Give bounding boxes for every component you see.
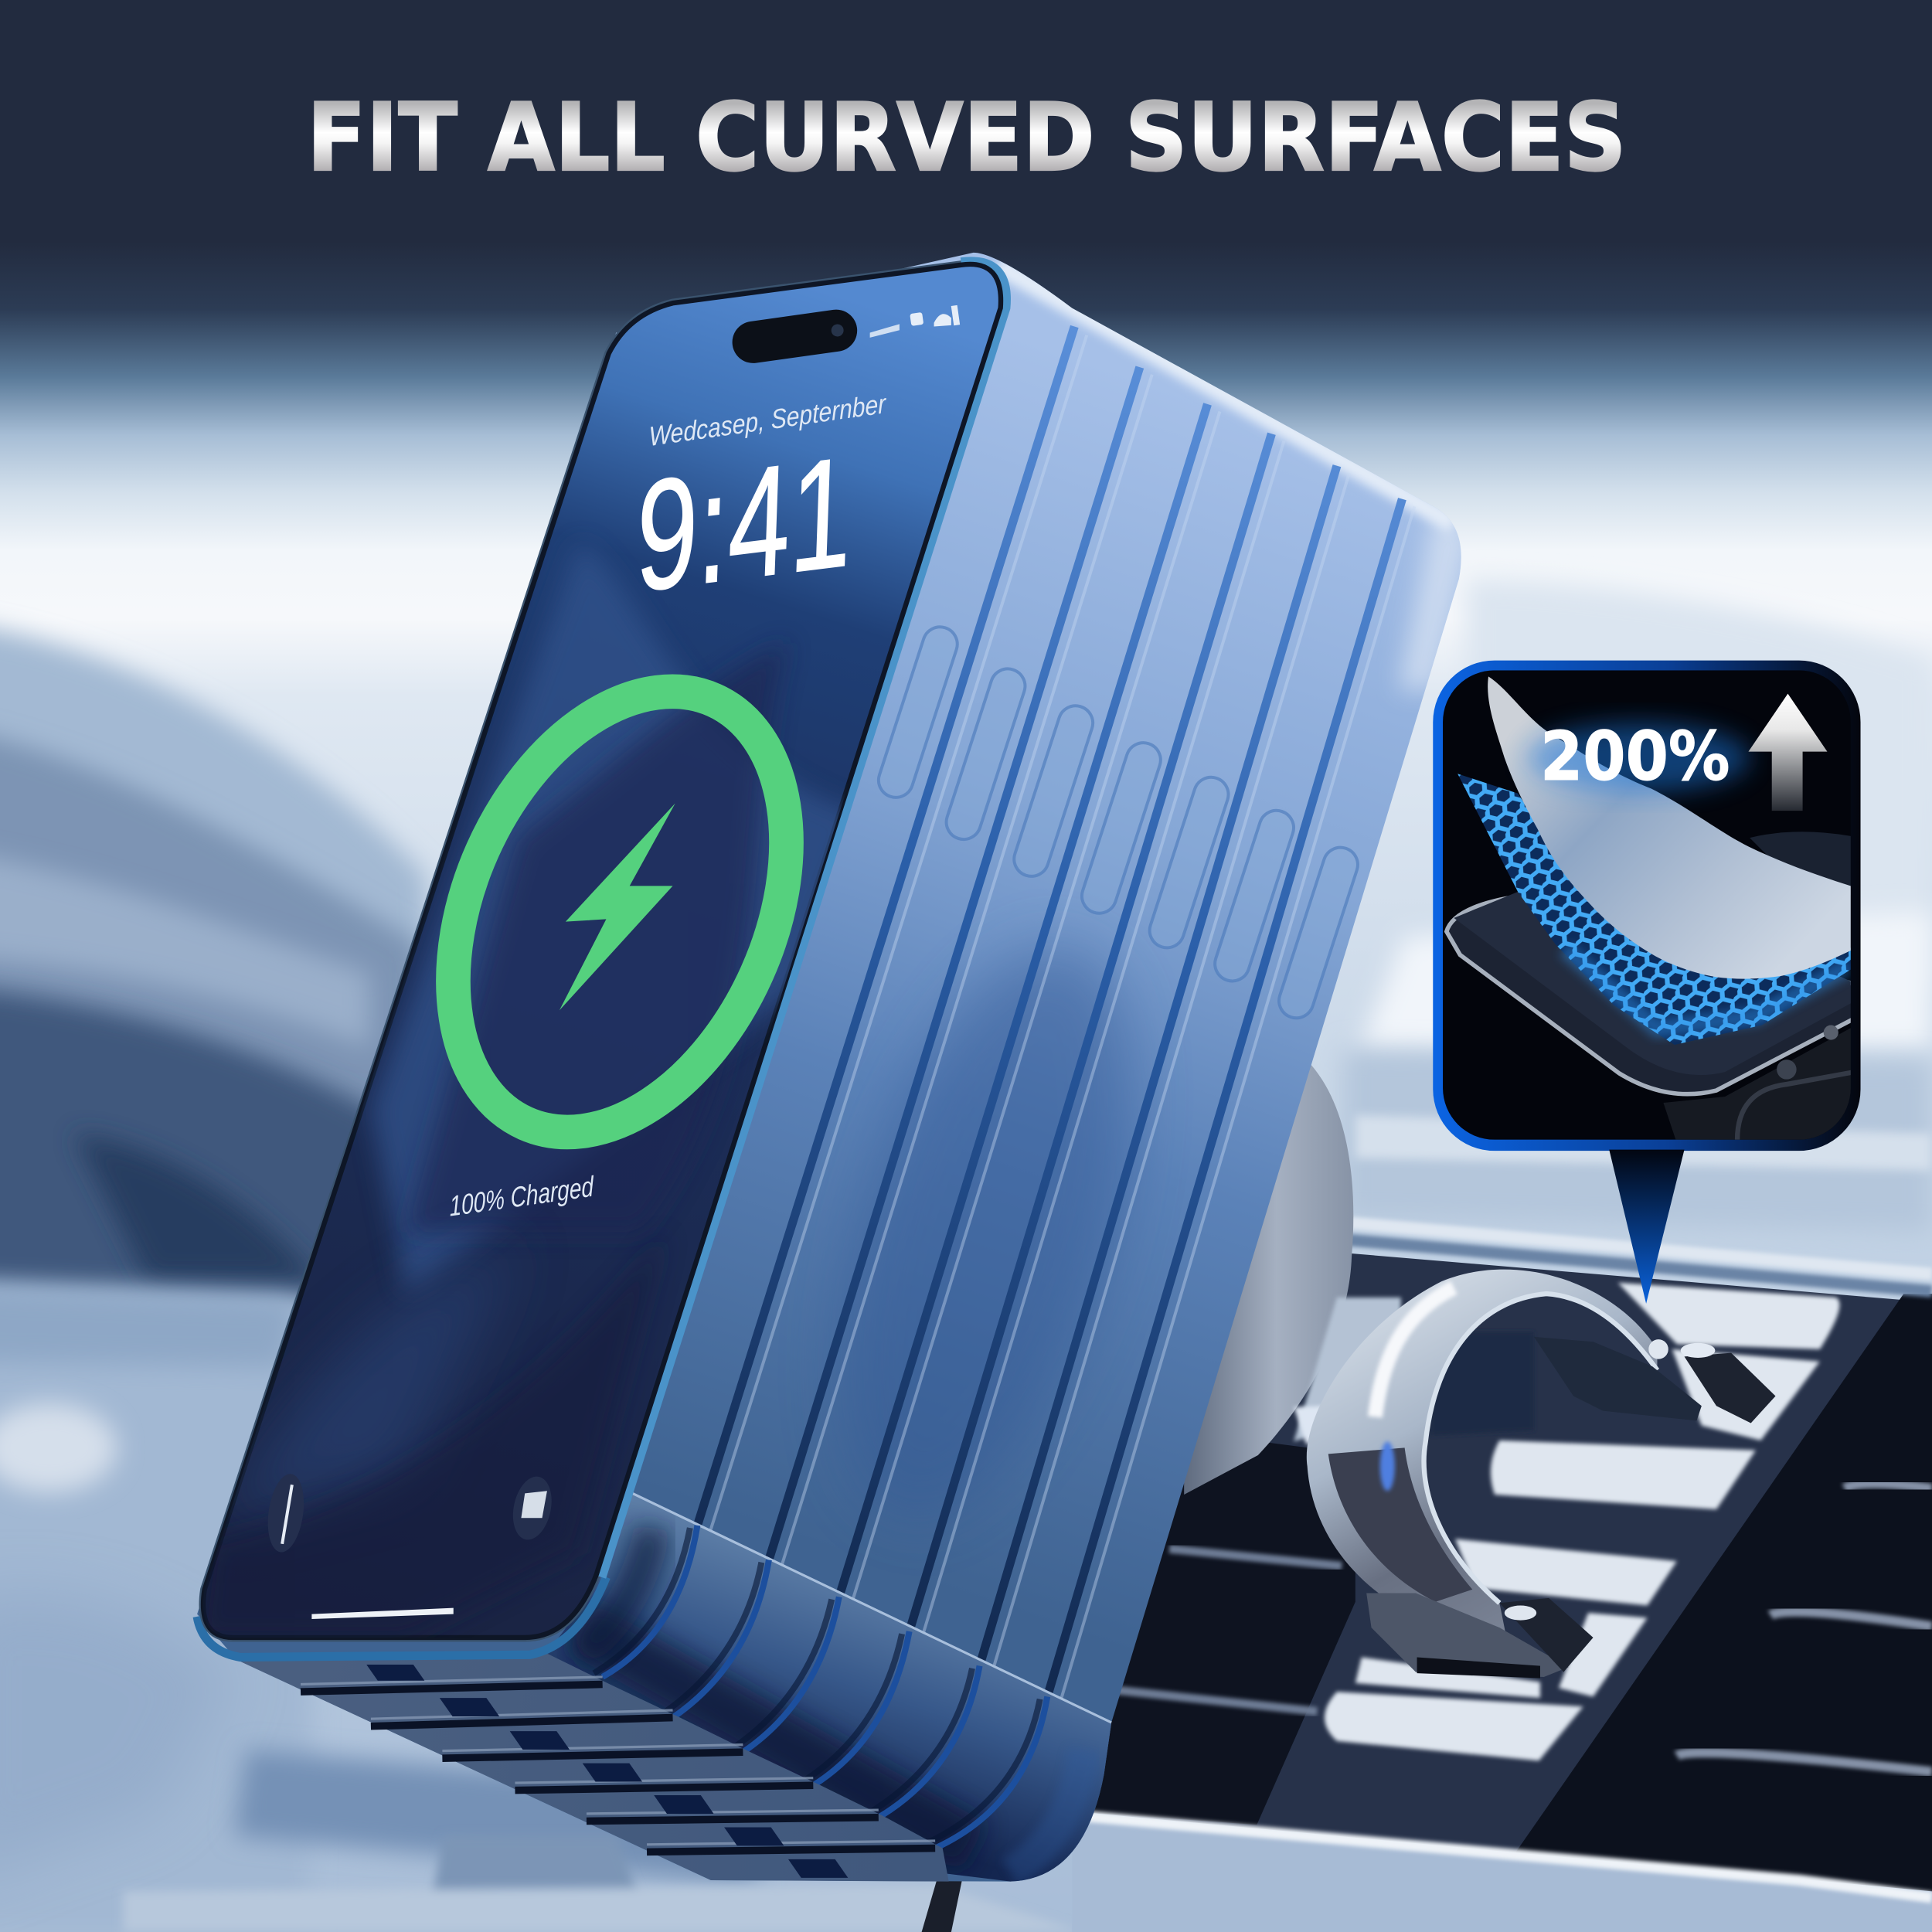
date label: Wedcasep, Septernber (648, 389, 887, 452)
ribs (697, 327, 1402, 1696)
phone frame (203, 264, 1001, 1638)
vent slats (1325, 1283, 1839, 1760)
bottom cap (543, 1490, 1111, 1882)
mount below plate (1663, 1022, 1861, 1140)
underside layers (236, 1651, 949, 1882)
charger body (197, 253, 1472, 1882)
title: FIT ALL CURVED SURFACES (307, 83, 1627, 192)
up arrow (1748, 694, 1827, 811)
wallpaper waves (197, 543, 862, 1639)
lower clamp (1366, 1594, 1569, 1677)
callout image area (1443, 670, 1861, 1140)
callout border (1433, 661, 1861, 1151)
camera icon (508, 1473, 557, 1543)
honeycomb mesh (1458, 774, 1855, 1045)
air vent and chrome trim (1072, 1223, 1932, 1932)
upper clamp (1534, 1337, 1702, 1420)
green charging ring (388, 639, 852, 1185)
front rim (197, 1577, 606, 1657)
callout: 200% magnetic adhesion (1433, 661, 1861, 1304)
callout pointer (1609, 1150, 1685, 1304)
phone (197, 262, 1006, 1639)
curved pad (1488, 676, 1855, 979)
base plate (1447, 896, 1861, 1094)
lightning bolt (560, 804, 675, 1010)
magnetic ball disk (1183, 1053, 1353, 1495)
home bar (311, 1608, 454, 1619)
charged label: 100% Charged (449, 1170, 595, 1223)
status icons (870, 305, 960, 338)
charging cable (922, 1872, 964, 1932)
text glow (1528, 723, 1750, 792)
200% label: 200% (1540, 717, 1730, 796)
slider buttons (874, 622, 1362, 1022)
dynamic island (730, 307, 860, 366)
clock: 9:41 (634, 423, 855, 625)
vent clip ring (1294, 1270, 1776, 1679)
body side shell (197, 253, 1461, 1882)
flashlight icon (264, 1471, 308, 1555)
